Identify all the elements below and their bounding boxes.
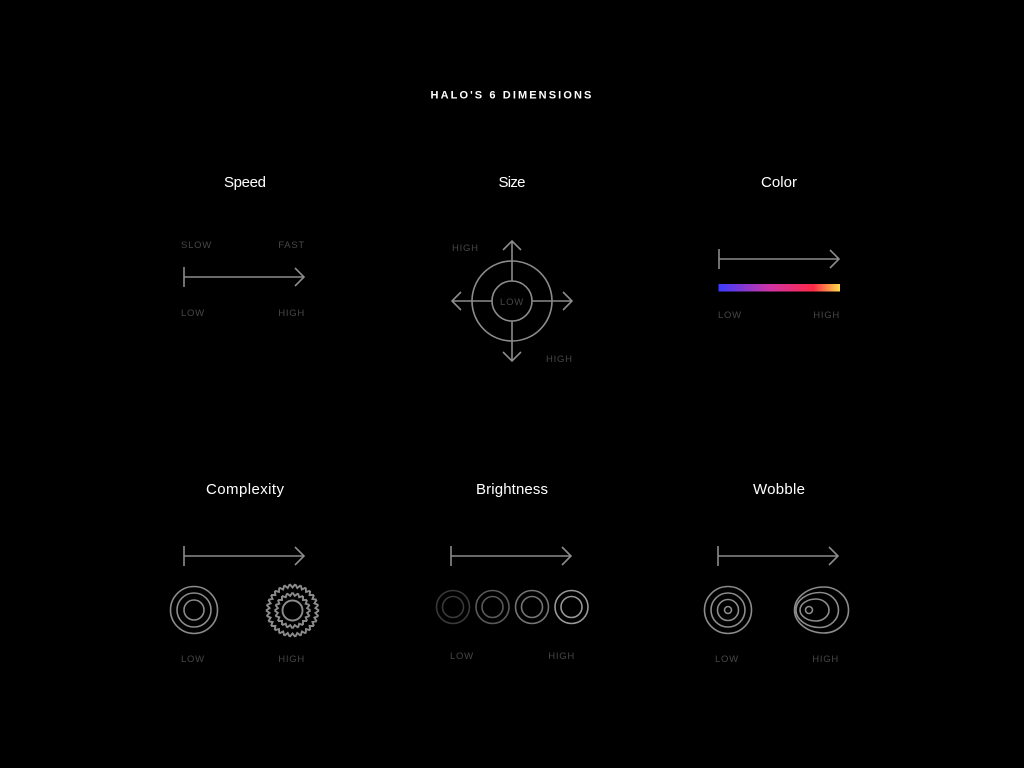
label: brightness high: HIGH bbox=[548, 651, 575, 662]
icon: low complexity rings bbox=[170, 586, 218, 634]
icon: brightness level 3 bbox=[516, 590, 548, 624]
icon: brightness level 2 bbox=[476, 590, 509, 624]
arrow: color scale bbox=[719, 249, 839, 269]
label: size high bottom: HIGH bbox=[546, 354, 573, 365]
title: HALO'S 6 DIMENSIONS bbox=[431, 90, 593, 102]
heading: complexity: Complexity bbox=[206, 481, 284, 498]
panel: size bbox=[452, 174, 573, 365]
label: size low: LOW bbox=[500, 297, 524, 308]
label: fast: FAST bbox=[278, 240, 305, 251]
label: complexity high: HIGH bbox=[278, 654, 305, 665]
heading: color: Color bbox=[761, 174, 797, 191]
icon: high wobble egg rings bbox=[794, 587, 848, 633]
arrow: complexity scale bbox=[184, 546, 304, 566]
label: wobble low: LOW bbox=[715, 654, 739, 665]
label: wobble high: HIGH bbox=[812, 654, 839, 665]
heading: brightness: Brightness bbox=[476, 481, 548, 498]
diagram: size target with arrows bbox=[452, 241, 572, 361]
icon: high complexity rings bbox=[254, 572, 328, 644]
gradient bar bbox=[718, 284, 840, 292]
icon: brightness level 1 bbox=[436, 590, 470, 624]
label: color high: HIGH bbox=[813, 310, 840, 321]
label: size high top: HIGH bbox=[452, 243, 479, 254]
panel: color bbox=[718, 174, 840, 321]
heading: size: Size bbox=[498, 174, 526, 191]
heading: wobble: Wobble bbox=[753, 481, 805, 498]
heading: speed: Speed bbox=[224, 174, 266, 191]
label: slow: SLOW bbox=[181, 240, 212, 251]
label: speed low: LOW bbox=[181, 308, 205, 319]
panel: complexity bbox=[170, 481, 328, 665]
label: complexity low: LOW bbox=[181, 654, 205, 665]
panel: wobble bbox=[704, 481, 848, 665]
icon: low wobble rings bbox=[704, 586, 752, 634]
arrow: brightness scale bbox=[451, 546, 571, 566]
icon: brightness level 4 bbox=[555, 590, 588, 624]
label: speed high: HIGH bbox=[278, 308, 305, 319]
panel: speed bbox=[181, 174, 305, 319]
panel: brightness bbox=[436, 481, 588, 662]
arrow: wobble scale bbox=[718, 546, 838, 566]
label: brightness low: LOW bbox=[450, 651, 474, 662]
label: color low: LOW bbox=[718, 310, 742, 321]
arrow: speed scale bbox=[184, 267, 304, 287]
